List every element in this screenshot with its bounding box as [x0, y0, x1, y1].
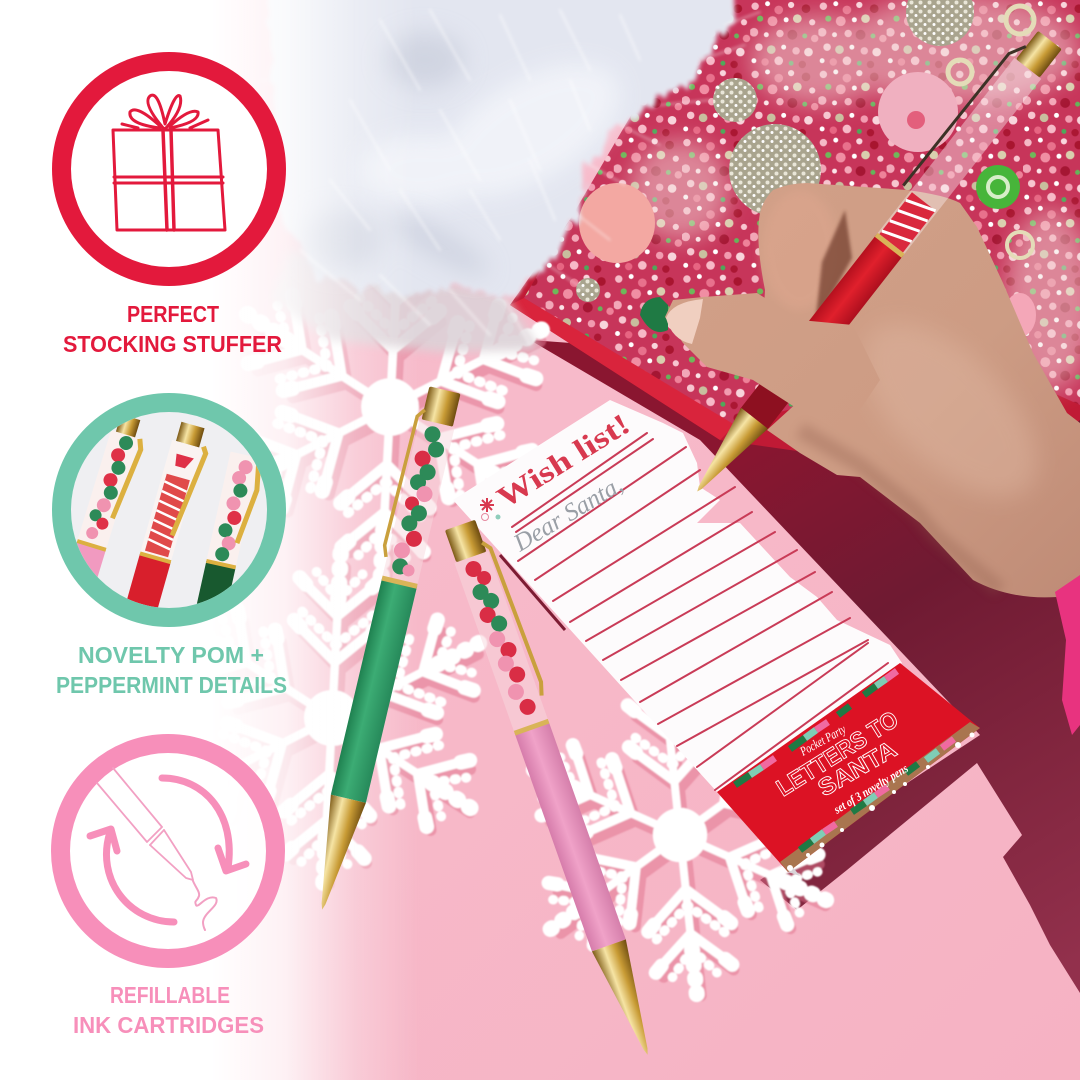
feature: refillable ink: [60, 744, 276, 1038]
star ornaments: [480, 498, 500, 520]
notepad: [453, 400, 980, 876]
skin highlight: [833, 293, 1067, 527]
icon: gift box: [113, 95, 225, 230]
ruled lines: [512, 433, 888, 790]
fingernail: [666, 299, 703, 344]
label: perfect stocking stuffer: PERFECT: [127, 301, 219, 327]
snowflakes: [159, 228, 855, 1012]
pad edge shadow: [500, 555, 565, 630]
fur highlights: [360, 37, 642, 223]
fur shading: [300, 32, 495, 285]
hand and pouch cast shadow: [530, 340, 1080, 993]
feature: stocking stuffer: [62, 62, 282, 357]
label: novelty pom peppermint details: PEPPERMINT DETAILS: [56, 672, 287, 698]
pink ring: [60, 744, 276, 958]
sequin: pink disc: [579, 183, 655, 263]
icon: refill arrows: [90, 778, 246, 922]
right mini pen: [196, 452, 260, 604]
finger tone: [762, 190, 838, 310]
pen photo: [71, 412, 267, 608]
white fade panel: [0, 0, 420, 1080]
glitter pouch: [510, 0, 1080, 480]
label: refillable ink cartridges: REFILLABLE: [110, 982, 230, 1008]
finger cleft: [815, 210, 852, 325]
index finger over pen: [665, 293, 880, 425]
footer title: Letters to Santa: LETTERS TO: [772, 706, 903, 802]
fur strands: [300, 10, 760, 345]
feature: novelty pom and peppermint: [56, 400, 287, 698]
label: refillable ink cartridges: INK CARTRIDGES: [73, 1012, 264, 1038]
pink pen: [443, 517, 670, 1061]
heading: Wish list: Wish list!: [491, 407, 636, 515]
footer trim blocks: [735, 671, 954, 850]
center mini pen: [127, 422, 208, 608]
red pen: [677, 24, 1063, 502]
left mini pen: [76, 418, 144, 577]
label: perfect stocking stuffer: STOCKING STUFFER: [63, 331, 282, 357]
hand: [758, 183, 1080, 597]
label: novelty pom peppermint details: NOVELTY POM +: [78, 642, 264, 668]
pale glitter haze: [630, 0, 1080, 390]
wrist crease shadow: [800, 430, 1000, 590]
teal ring: [62, 402, 276, 618]
sweater cuff: [1055, 575, 1080, 735]
footer dots: [787, 732, 974, 871]
icon: refill pen: [97, 768, 217, 930]
white fur cuff: [270, 0, 760, 352]
handwriting: Dear Santa: Dear Santa,: [508, 471, 628, 558]
footer subtitle: set of 3 novelty pens: [831, 761, 911, 817]
red ring: [62, 62, 276, 276]
footer title: Letters to Santa: SANTA: [814, 736, 901, 802]
green pen: [300, 385, 463, 914]
red footer band: [717, 663, 980, 872]
brand script: Pocket Party: [797, 721, 848, 759]
